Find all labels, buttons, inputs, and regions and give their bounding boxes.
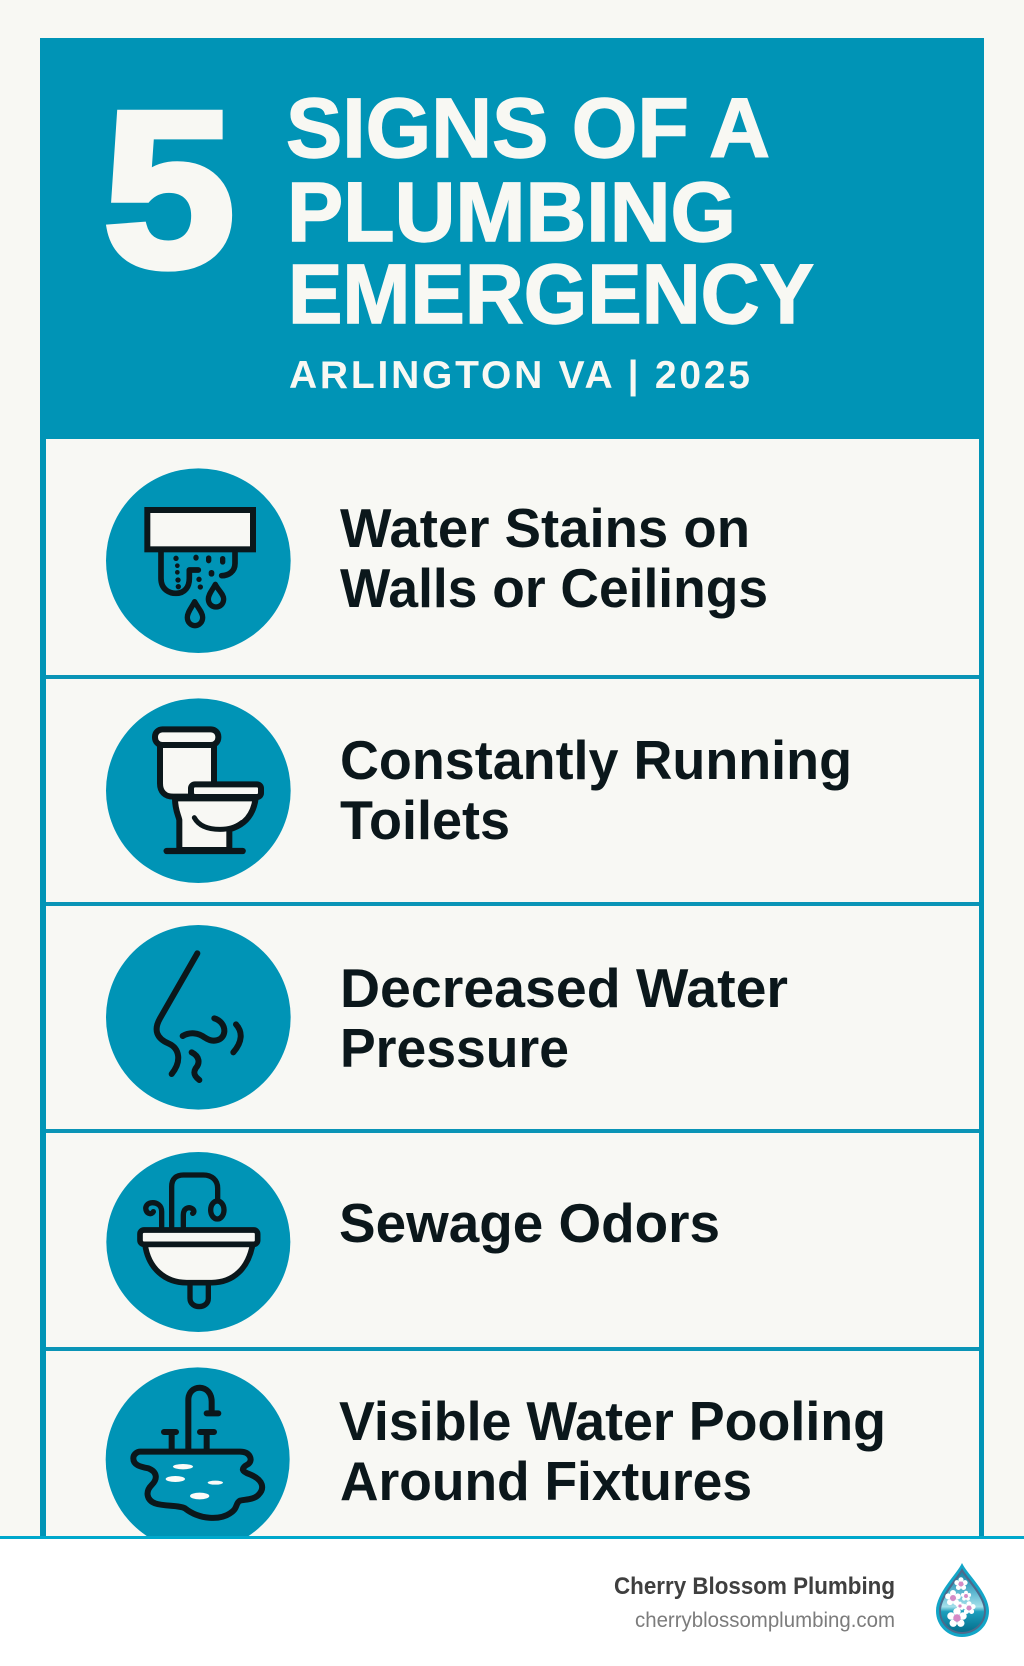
icon: faucet and puddle (106, 1367, 290, 1551)
icon: ceiling leak (106, 468, 291, 653)
label: water stains: Walls or Ceilings (340, 557, 768, 619)
label: visible water pooling: Around Fixtures (340, 1450, 752, 1512)
label: running toilets: Constantly Running (340, 729, 852, 791)
title (286, 81, 814, 341)
icon: cherry blossom water drop logo (936, 1563, 989, 1637)
label: water stains: Water Stains on (340, 497, 750, 559)
row 5: visible water pooling (106, 1367, 886, 1551)
label: running toilets: Toilets (340, 789, 510, 851)
row 2: running toilets (106, 698, 852, 883)
title: PLUMBING (287, 165, 736, 259)
label: decreased water pressure: Decreased Water (340, 957, 788, 1019)
icon: sink (106, 1152, 290, 1332)
label: decreased water pressure (340, 957, 788, 1079)
footer background (0, 1537, 1024, 1666)
row dividers (46, 675, 979, 1351)
panel: list area (46, 439, 979, 1538)
label: visible water pooling (339, 1390, 886, 1512)
title: SIGNS OF A (286, 81, 770, 175)
icon: nose (106, 925, 291, 1110)
footer rule (0, 1536, 1024, 1539)
footer (0, 1536, 1024, 1666)
website: cherryblossomplumbing.com (635, 1609, 895, 1632)
label: running toilets (340, 729, 852, 851)
company name: Cherry Blossom Plumbing (614, 1573, 895, 1600)
row 3: decreased water pressure (106, 925, 788, 1110)
icon: toilet (106, 698, 291, 883)
label: decreased water pressure: Pressure (340, 1017, 569, 1079)
row 1: water stains (106, 468, 768, 653)
label: visible water pooling: Visible Water Pooling (339, 1390, 886, 1452)
label: sewage odors: Sewage Odors (339, 1192, 720, 1254)
title: EMERGENCY (288, 247, 814, 341)
header (103, 66, 814, 397)
label: water stains (340, 497, 768, 619)
big number 5: 5 (103, 66, 235, 314)
subtitle: ARLINGTON VA | 2025 (289, 354, 750, 397)
row 4: sewage odors (106, 1152, 720, 1332)
